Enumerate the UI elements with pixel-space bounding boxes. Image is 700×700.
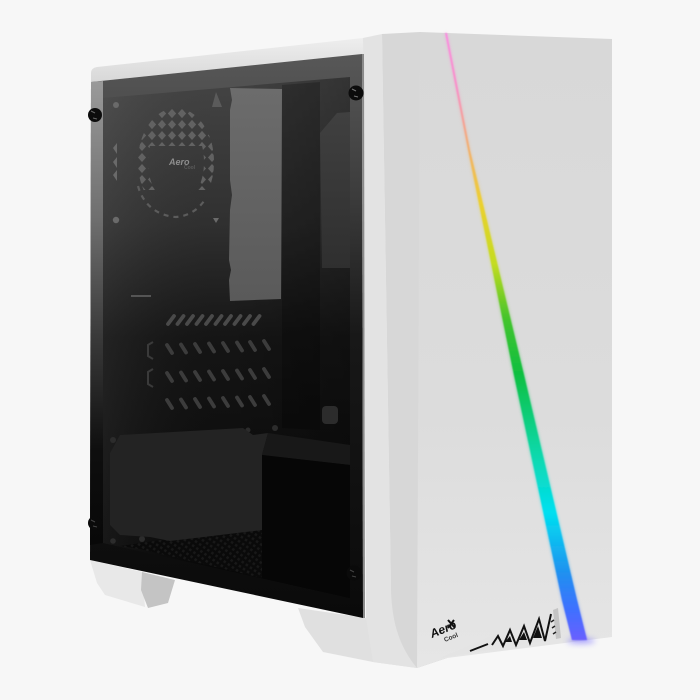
- central panel: [229, 88, 282, 301]
- screw: bottom right: [346, 566, 362, 580]
- top glass trim: [91, 38, 363, 82]
- screw: top left: [88, 108, 102, 122]
- interior side shading: [103, 77, 350, 598]
- cable cutouts: [148, 342, 153, 387]
- product illustration: PC case: [88, 32, 612, 668]
- floor mesh: [120, 525, 262, 578]
- right glass edge highlight: [362, 54, 365, 618]
- right foot and lower chamfer: [298, 590, 447, 668]
- standoff details: [110, 406, 338, 544]
- power supply: [110, 428, 268, 541]
- strip core: [445, 33, 587, 640]
- drive cage: [262, 455, 350, 598]
- slot rows: [167, 341, 269, 408]
- vent end cap: [553, 608, 561, 639]
- fan grille: [138, 108, 214, 217]
- front strip facet: [363, 34, 417, 668]
- side diamond holes: [143, 114, 209, 210]
- glass side panel: [88, 54, 365, 618]
- interior dark column: [282, 82, 320, 430]
- logo star: [448, 620, 455, 628]
- screw: top right: [348, 86, 364, 100]
- top slot row: [168, 316, 260, 324]
- left foot: [90, 560, 175, 608]
- front logo: Aero: [427, 618, 458, 641]
- mounting marks: [113, 92, 222, 297]
- vent zigzag: [470, 614, 551, 651]
- fan grille: Cool: [184, 165, 196, 171]
- logo: Aero: [168, 157, 190, 167]
- RGB light strip: [445, 33, 595, 644]
- front logo: Cool: [443, 632, 459, 644]
- strip glow: [445, 33, 587, 640]
- interior: [103, 77, 350, 598]
- strip base glow: [567, 638, 595, 644]
- drive cage top: [262, 433, 350, 465]
- vent plate: [440, 608, 561, 658]
- curved facet: [382, 32, 447, 668]
- upper diamond holes: [140, 109, 212, 146]
- case front: three facets: [363, 32, 612, 668]
- vent inner triangles: [505, 626, 542, 642]
- left glass edge: [90, 81, 103, 545]
- main face: [417, 32, 612, 668]
- screw: bottom left: [88, 516, 102, 530]
- vent dots: [551, 620, 556, 634]
- lower arc: [138, 186, 206, 217]
- glass pane: [90, 54, 363, 618]
- right panel: [320, 112, 350, 268]
- vent with pattern: [440, 608, 561, 658]
